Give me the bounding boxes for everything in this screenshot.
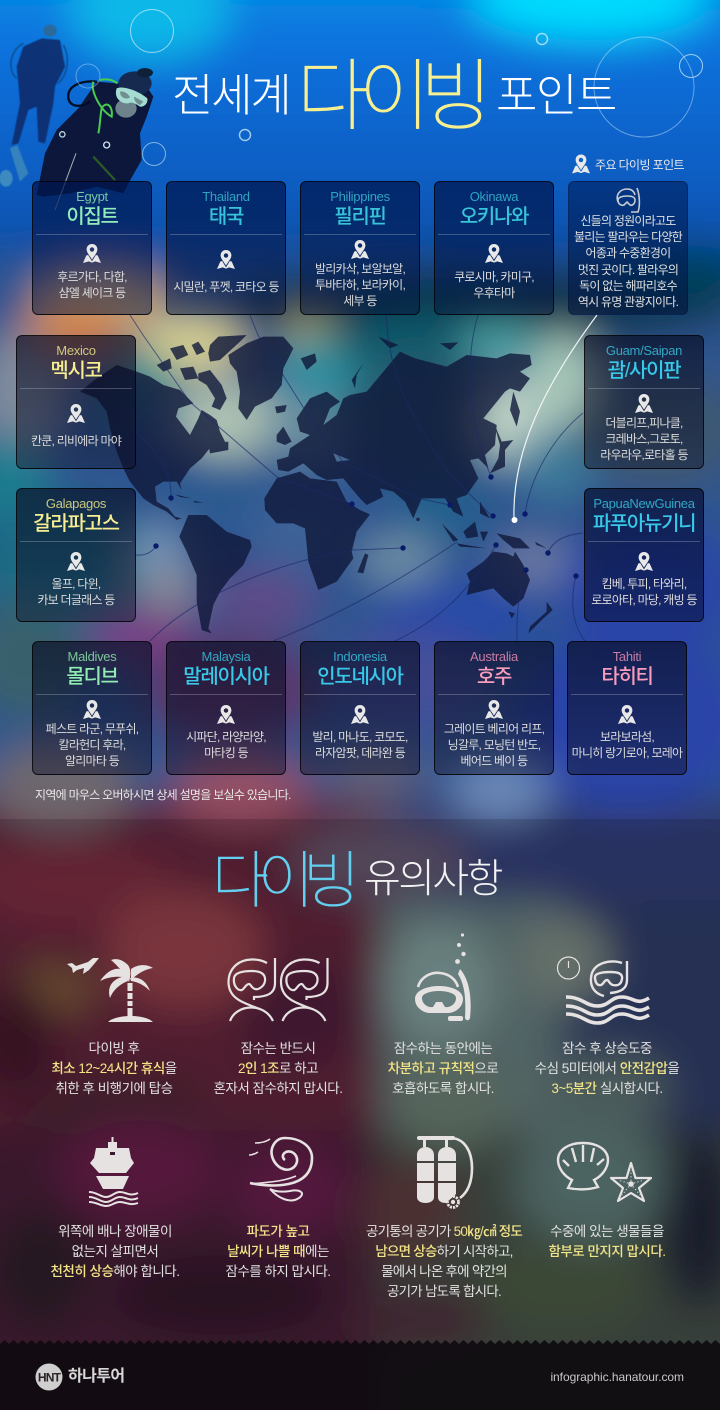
name: 말레이시아 (183, 666, 269, 688)
heading: 유의사항: 유의사항 (364, 857, 501, 901)
places: 칼라헌디 후라, (59, 738, 125, 752)
diver: front silhouette (37, 68, 153, 210)
places: 울프, 다윈, (52, 577, 100, 591)
icon: pin (485, 700, 503, 719)
description: 멋진 곳이다. 팔라우의 (578, 263, 678, 277)
icon: pin (485, 244, 503, 263)
precaution: air supply (366, 1224, 522, 1299)
places: 더블리프,피나클, (605, 416, 683, 430)
places (46, 722, 138, 768)
precaution: ascend slowly: 없는지 살피면서 (72, 1244, 158, 1259)
label: Malaysia (202, 649, 250, 664)
icon: pin (351, 705, 369, 724)
footer logo mark (36, 1364, 62, 1390)
description: 어종과 수중환경이 (586, 246, 670, 260)
precaution: bad weather (225, 1224, 331, 1279)
name: 파푸아뉴기니 (593, 513, 695, 535)
map: world continents (80, 335, 553, 633)
places: 베어드 베이 등 (461, 754, 527, 768)
places: 마니히 랑기로아, 모레아 (572, 746, 682, 760)
places: 닝갈루, 모닝턴 반도, (448, 738, 540, 752)
icon: clock, mask and waves (558, 957, 649, 1023)
label: Egypt (76, 189, 108, 204)
precaution: breathing: 잠수하는 동안에는 (394, 1041, 492, 1056)
precaution: ascend slowly: 천천히 상승해야 합니다. (51, 1264, 179, 1279)
places: 후르가다, 다합, (57, 270, 127, 284)
precaution: safety stop (535, 1041, 680, 1096)
heading: diving precautions (212, 847, 502, 916)
description: 불리는 팔라우는 다양한 (574, 230, 682, 244)
icon: shell and starfish (558, 1143, 651, 1201)
card: Tahiti (567, 641, 687, 775)
precaution: air supply: 물에서 나온 후에 약간의 (381, 1264, 507, 1279)
icon: pin (351, 240, 369, 259)
precaution: marine life: 수중에 있는 생물들을 (550, 1224, 664, 1239)
name: 타히티 (601, 666, 653, 688)
title: 다이빙: 다이빙 (297, 52, 482, 140)
name: 멕시코 (50, 360, 102, 382)
card: Galapagos (16, 488, 136, 622)
places: 페스트 라군, 무푸쉬, (46, 722, 138, 736)
precaution: rest before flying: 다이빙 후 (89, 1041, 139, 1056)
dark overlay of lower section (0, 819, 720, 1410)
footer band (0, 1340, 720, 1410)
card: Philippines (300, 181, 420, 315)
places: 샴엘 셰이크 등 (59, 286, 125, 300)
icon: two divers with masks (228, 958, 328, 1021)
precaution: rest before flying (51, 1041, 177, 1096)
map: Americas, Greenland and Africa (80, 335, 370, 633)
places: 보라보라섬, (600, 730, 654, 744)
precaution: marine life: 함부로 만지지 맙시다. (548, 1244, 666, 1259)
label: Galapagos (46, 496, 106, 511)
icon: pin (217, 250, 235, 269)
icon: pin (83, 244, 101, 263)
places (186, 730, 266, 760)
name: 태국 (209, 206, 243, 228)
diver: rear silhouette (0, 25, 67, 187)
label: Philippines (330, 189, 390, 204)
dive point dots (153, 474, 579, 579)
logo mark letters: HNT (38, 1370, 62, 1384)
label: Tahiti (613, 649, 641, 664)
label: Thailand (202, 189, 250, 204)
card: Australia (434, 641, 554, 775)
precaution: safety stop: 3~5분간 실시합시다. (551, 1081, 663, 1096)
places (57, 270, 127, 300)
description: 역시 유명 관광지이다. (578, 295, 678, 309)
card: Papua New Guinea (584, 488, 704, 622)
name: 갈라파고스 (33, 513, 119, 535)
places: 세부 등 (343, 294, 377, 308)
precaution: air supply: 공기가 남도록 합시다. (387, 1284, 501, 1299)
name: 필리핀 (334, 206, 386, 228)
description: 신들의 정원이라고도 (580, 214, 676, 228)
places: 그레이트 베리어 리프, (444, 722, 544, 736)
precaution: rest before flying: 취한 후 비행기에 탑승 (55, 1081, 173, 1096)
precaution: rest before flying: 최소 12~24시간 휴식을 (51, 1061, 177, 1076)
icon: pin (635, 394, 653, 413)
connection lines from cards to dive points (130, 315, 585, 641)
precaution: bad weather: 날씨가 나쁠 때에는 (227, 1244, 329, 1259)
places: 시파단, 라양라양, (186, 730, 266, 744)
precaution: safety stop: 수심 5미터에서 안전감압을 (535, 1061, 679, 1076)
white highlighted line to Palau (514, 315, 597, 519)
card: Maldives (32, 641, 152, 775)
hover note: 지역에 마우스 오버하시면 상세 설명을 보실수 있습니다. (35, 788, 291, 802)
card: Indonesia (300, 641, 420, 775)
card: Egypt (32, 181, 152, 315)
legend text: 주요 다이빙 포인트 (595, 158, 684, 172)
icon: big wave and birds (249, 1138, 312, 1200)
label: Australia (470, 649, 518, 664)
label: Okinawa (470, 189, 518, 204)
card: Palau description (568, 181, 688, 315)
places: 킴베, 투피, 타와리, (602, 577, 686, 591)
places: 발리, 마나도, 코모도, (312, 730, 408, 744)
map: Eurasia, Australia and islands (277, 337, 553, 633)
places: 라우라우,로타홀 등 (600, 448, 688, 462)
name: 호주 (477, 666, 511, 688)
label: Mexico (56, 343, 96, 358)
precaution: safety stop: 잠수 후 상승도중 (562, 1041, 652, 1056)
icon: pin (83, 700, 101, 719)
bubbles (76, 10, 702, 166)
places (312, 730, 408, 760)
label: Indonesia (333, 649, 387, 664)
icon: pin (635, 552, 653, 571)
places: 알리마타 등 (65, 754, 119, 768)
label: PapuaNewGuinea (593, 496, 695, 511)
places (454, 270, 534, 300)
icon: plane and palm tree (67, 958, 153, 1022)
places (444, 722, 544, 768)
places: 마타킹 등 (204, 746, 248, 760)
title: 전세계: 전세계 (172, 70, 290, 121)
places (315, 262, 405, 308)
places: 카보 더글래스 등 (37, 593, 115, 607)
divers photo (0, 25, 153, 210)
places (600, 416, 688, 462)
places: 라자암팟, 데라완 등 (315, 746, 405, 760)
precaution: ascend slowly (51, 1224, 179, 1279)
description: 독이 없는 해파리호수 (579, 279, 677, 293)
precaution: marine life (548, 1224, 666, 1259)
precaution: buddy system: 잠수는 반드시 (241, 1041, 315, 1056)
footer: site url: infographic.hanatour.com (550, 1370, 684, 1384)
precaution: bad weather: 파도가 높고 (247, 1224, 309, 1239)
legend: main dive points (572, 154, 684, 174)
places (572, 730, 683, 760)
precaution: breathing: 차분하고 규칙적으로 (388, 1061, 498, 1076)
title: 포인트: 포인트 (496, 70, 616, 121)
icon: legend pin (572, 154, 590, 174)
places: 우후타마 (473, 286, 515, 300)
name: 몰디브 (66, 666, 118, 688)
places: 크레바스,그로토, (605, 432, 683, 446)
white point: Palau (512, 517, 518, 523)
precaution: buddy system (214, 1041, 342, 1096)
precaution: bad weather: 잠수를 하지 맙시다. (225, 1264, 331, 1279)
places: 칸쿤, 리비에라 마야 (31, 434, 121, 448)
icon: pin (618, 705, 636, 724)
description (574, 214, 682, 309)
precaution: air supply: 공기통의 공기가 50㎏/㎠ 정도 (366, 1224, 522, 1239)
icon: snorkel with bubbles (415, 933, 471, 1021)
icon: air tanks (417, 1136, 472, 1208)
name: 오키나와 (460, 206, 528, 228)
precaution: buddy system: 2인 1조로 하고 (238, 1061, 318, 1076)
label: Guam/Saipan (606, 343, 682, 358)
precaution: breathing (388, 1041, 498, 1096)
precaution: ascend slowly: 위쪽에 배나 장애물이 (58, 1224, 172, 1239)
label: Maldives (68, 649, 116, 664)
heading: 다이빙: 다이빙 (212, 847, 349, 916)
card: Thailand (166, 181, 286, 315)
icon: snorkel mask (616, 188, 640, 213)
places: 쿠로시마, 카미구, (454, 270, 534, 284)
precaution: breathing: 호흡하도록 합시다. (392, 1081, 494, 1096)
icon: pin (67, 552, 85, 571)
name: 인도네시아 (317, 666, 403, 688)
places: 투바타하, 보라카이, (315, 278, 405, 292)
name: 괌/사이판 (608, 360, 680, 382)
icon: ship on waves (89, 1137, 138, 1206)
icon: pin (67, 404, 85, 423)
precaution: buddy system: 혼자서 잠수하지 맙시다. (214, 1081, 342, 1096)
places: 시밀란, 푸껫, 코타오 등 (173, 280, 279, 294)
places (37, 577, 115, 607)
card: Mexico (16, 335, 136, 469)
precaution: air supply: 남으면 상승하기 시작하고, (375, 1244, 513, 1259)
footer: brand name: 하나투어 (68, 1368, 124, 1385)
places: 로로아타, 마당, 캐빙 등 (591, 593, 697, 607)
card: Okinawa (434, 181, 554, 315)
card: Malaysia (166, 641, 286, 775)
name: 이집트 (66, 206, 118, 228)
places: 발리카삭, 보알보알, (315, 262, 405, 276)
places (591, 577, 697, 607)
title (172, 52, 616, 140)
card: Guam/Saipan (584, 335, 704, 469)
icon: pin (217, 705, 235, 724)
